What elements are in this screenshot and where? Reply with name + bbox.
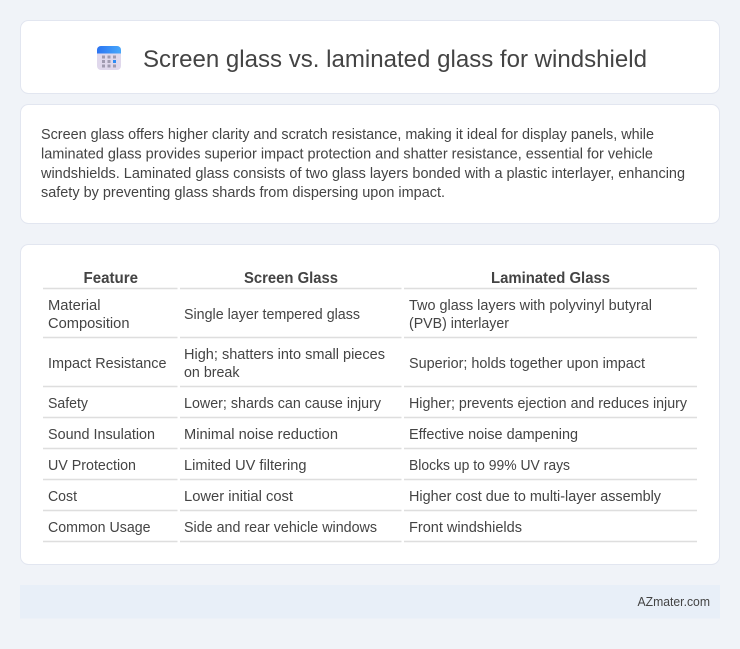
summary text: laminated glass provides superior impact protection and shatter resistance, essential for vehicle <box>41 146 653 162</box>
row: common usage <box>48 520 522 536</box>
row: impact resistance: High; shatters into small pieces <box>184 347 385 363</box>
row: cost: Higher cost due to multi-layer assembly <box>409 489 662 505</box>
row: cost: Cost <box>48 489 77 505</box>
row: sound insulation <box>48 427 578 443</box>
summary text: Screen glass offers higher clarity and scratch resistance, making it ideal for display panels, while <box>41 127 654 143</box>
summary text: safety by preventing glass shards from dispersing upon impact. <box>41 185 445 201</box>
row: safety <box>48 396 688 412</box>
row: material composition: Two glass layers with polyvinyl butyral <box>409 298 652 314</box>
row: impact resistance: on break <box>184 365 240 381</box>
footer <box>20 585 720 618</box>
row: material composition: Single layer tempered glass <box>184 307 360 323</box>
icon: calendar <box>97 46 121 70</box>
row: material composition <box>48 298 652 332</box>
summary text: windshields. Laminated glass consists of two glass layers bonded with a plastic interlayer, enhancing <box>40 166 685 182</box>
panel: summary <box>20 104 720 224</box>
panel: title card <box>20 20 720 94</box>
row: sound insulation: Effective noise dampening <box>409 427 578 443</box>
row: uv protection: Blocks up to 99% UV rays <box>409 458 570 474</box>
row: cost: Lower initial cost <box>184 489 293 505</box>
panel: comparison table <box>20 244 720 564</box>
row: material composition: (PVB) interlayer <box>409 316 509 332</box>
table header row <box>84 270 610 287</box>
summary text <box>40 127 685 201</box>
row: uv protection <box>48 458 570 474</box>
row: impact resistance: Superior; holds together upon impact <box>409 356 645 372</box>
footer credit: AZmater.com <box>638 595 710 609</box>
row: sound insulation: Minimal noise reduction <box>184 427 338 443</box>
row: impact resistance: Impact Resistance <box>48 356 166 372</box>
table header row: Feature <box>84 270 138 287</box>
row: safety: Higher; prevents ejection and reduces injury <box>409 396 688 412</box>
table header row: Screen Glass <box>244 270 338 287</box>
row: sound insulation: Sound Insulation <box>48 427 155 443</box>
row: common usage: Side and rear vehicle windows <box>184 520 377 536</box>
title: Screen glass vs. laminated glass for windshield <box>143 46 647 73</box>
row: impact resistance <box>48 347 645 381</box>
row: safety: Safety <box>48 396 89 412</box>
row: common usage: Front windshields <box>409 520 522 536</box>
row: material composition: Composition <box>48 316 130 332</box>
row: uv protection: Limited UV filtering <box>184 458 306 474</box>
row: uv protection: UV Protection <box>48 458 136 474</box>
table header row: Laminated Glass <box>491 270 610 287</box>
row: safety: Lower; shards can cause injury <box>184 396 382 412</box>
row: material composition: Material <box>48 298 100 314</box>
row: cost <box>48 489 662 505</box>
row: common usage: Common Usage <box>48 520 150 536</box>
